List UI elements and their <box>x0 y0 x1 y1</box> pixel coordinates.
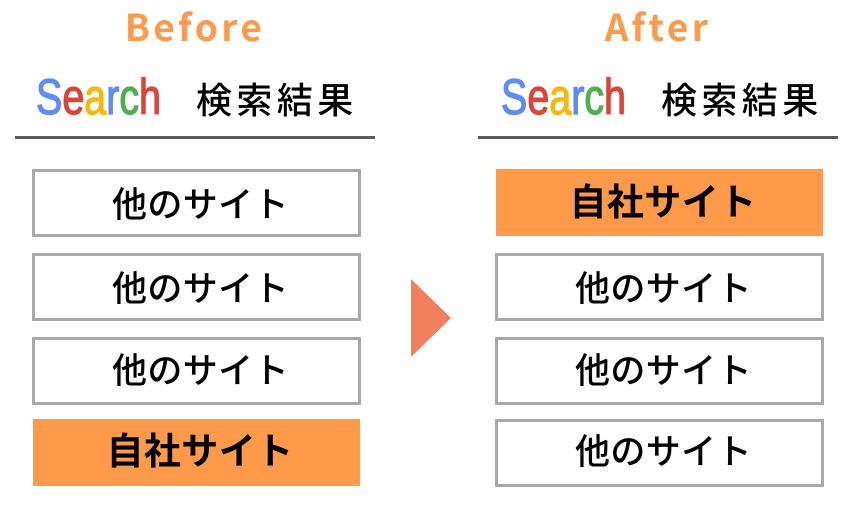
result: other site 2 <box>32 253 361 321</box>
result: own site <box>33 419 360 486</box>
result: own site: 自社サイト <box>106 421 294 475</box>
result: other site 3 <box>495 419 824 487</box>
result: other site 3: 他のサイト <box>112 343 289 394</box>
panel: before <box>15 0 375 486</box>
result: other site 1 <box>32 169 361 237</box>
result: other site 1: 他のサイト <box>575 261 752 312</box>
logo: Search: Search <box>36 69 161 125</box>
result: other site 2: 他のサイト <box>575 343 752 394</box>
label: search results: 検索結果 <box>661 72 823 124</box>
arrow <box>411 279 451 357</box>
panel: after <box>478 0 838 487</box>
result: other site 2: 他のサイト <box>112 261 289 312</box>
logo: Search: Search <box>501 69 626 125</box>
result: other site 3 <box>32 337 361 405</box>
result: own site: 自社サイト <box>570 172 756 226</box>
result: own site <box>496 169 823 236</box>
result: other site 2 <box>495 337 824 405</box>
result: other site 1 <box>495 253 824 321</box>
label: search results: 検索結果 <box>196 72 358 124</box>
result: other site 1: 他のサイト <box>112 177 289 228</box>
result: other site 3: 他のサイト <box>575 424 752 475</box>
